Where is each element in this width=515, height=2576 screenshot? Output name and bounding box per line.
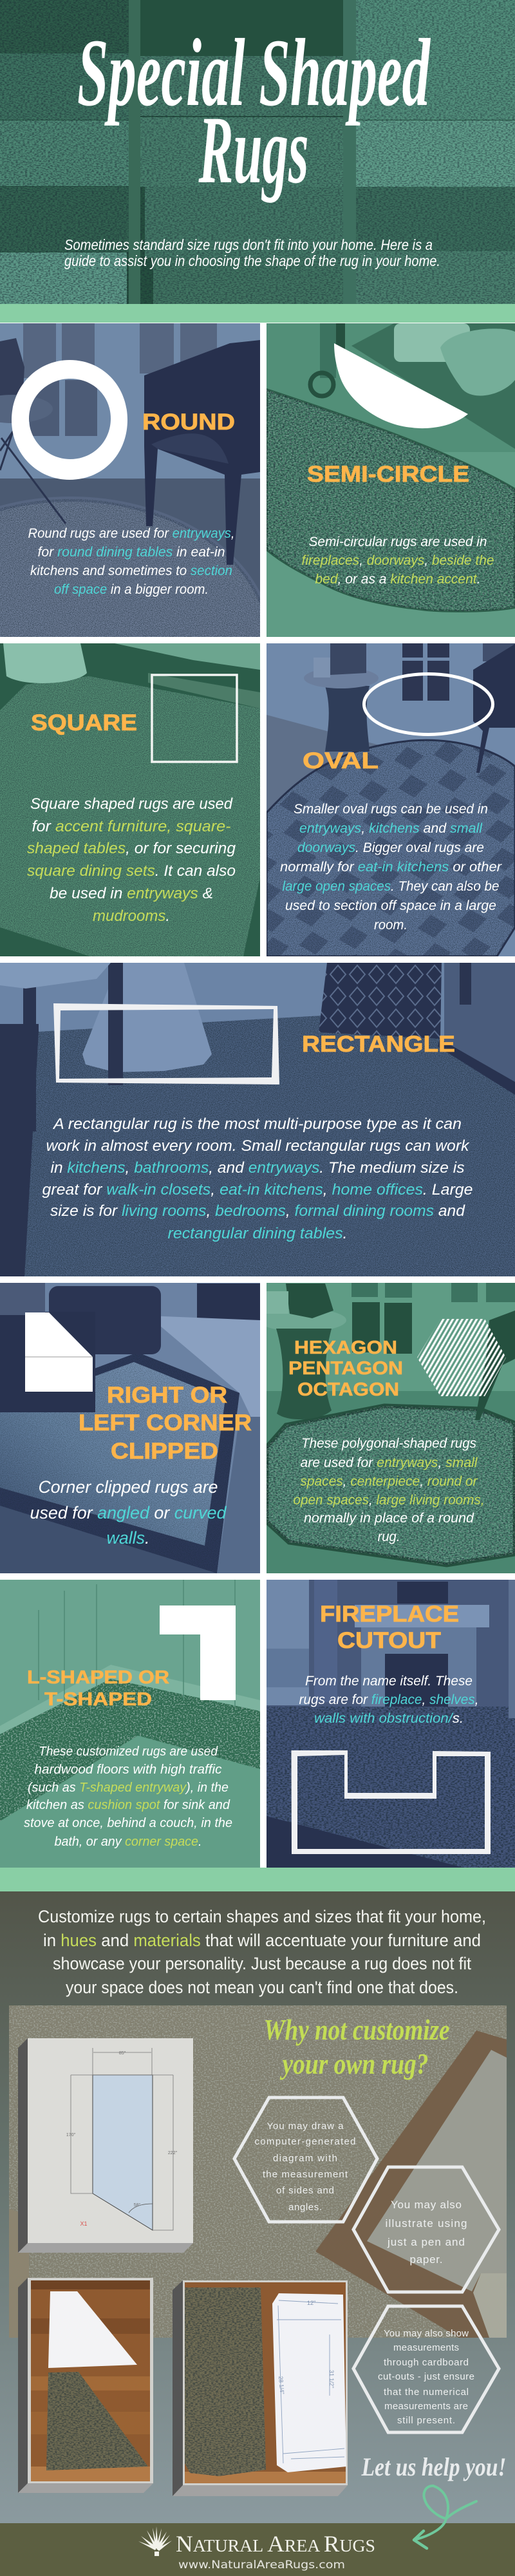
text: round description: kitchens and sometimes to section [30,564,232,578]
text: round description [28,526,235,597]
hexagon callout: pen and paper: just a pen and [387,2236,465,2248]
icon: square outline [152,675,237,762]
heading: L-shaped or T-shaped: T-SHAPED [44,1689,152,1710]
text: oval description [280,802,502,933]
text: customize intro: your space does not mean you can't find one that does. [66,1978,458,1997]
hexagon callout: cardboard cut-outs: through cardboard [384,2357,469,2368]
heading: L-shaped or T-shaped [27,1667,169,1710]
text: fireplace description: rugs are for fireplace, shelves, [299,1692,479,1707]
icon: semi-circle [334,343,468,428]
photo: kitchen runner rug [0,1580,260,1868]
text: L-shaped description: These customized rugs are used [39,1745,218,1759]
icon: oval outline [364,674,493,734]
intro text [64,236,440,269]
text: rectangle description: A rectangular rug is the most multi-purpose type as it can [52,1115,462,1133]
green band bottom [0,1868,515,1891]
panel: L-shaped or T-shaped [0,1580,260,1868]
text: polygon description: normally in place of a round [304,1511,474,1526]
heading: fireplace cutout: CUTOUT [337,1628,441,1653]
text: customize intro [38,1907,486,1997]
panel: hexagon pentagon octagon [259,1283,515,1573]
photo card: second template and rug: 12" [307,2300,315,2306]
text: L-shaped description [24,1745,232,1849]
text: square description: be used in entryways & [50,885,213,902]
website url: www.NaturalAreaRugs.com [178,2559,345,2571]
diagram card: X1 [80,2221,88,2227]
text: round description: for round dining tables in eat-in [37,545,225,560]
text: rectangle description: in kitchens, bathrooms, and entryways. The medium size is [50,1159,465,1177]
heading: hexagon pentagon octagon: OCTAGON [297,1379,399,1400]
icon: rectangle outline [53,1003,279,1084]
text: square description: Square shaped rugs are used [30,795,233,813]
text: polygon description [294,1436,484,1544]
text: fireplace description: walls with obstruction/ s. [314,1711,464,1726]
photo card: second template and rug [173,2280,348,2496]
heading: semi-circle: SEMI-CIRCLE [307,462,469,487]
text: L-shaped description: kitchen as cushion spot for sink and [26,1798,230,1812]
hexagon callout: cardboard cut-outs: still present. [397,2415,455,2426]
text: polygon description: These polygonal-shaped rugs [301,1436,476,1451]
panel: fireplace cutout [267,1580,515,1868]
green band top [0,304,515,323]
hexagon callout: computer diagram: angles. [288,2202,322,2213]
text: L-shaped description: (such as T-shaped entryway), in the [28,1781,229,1795]
hexagon callout: pen and paper: paper. [409,2253,443,2266]
text: round description: off space in a bigger room. [54,582,209,597]
photo: octagon rug [259,1283,515,1573]
photo card: second template and rug: 28 1/4" [277,2376,285,2394]
text: square description [27,795,236,925]
text: semi-circle description: bed, or as a kitchen accent. [315,572,480,587]
photo: corner clipped rug [0,1283,260,1573]
hexagon callout: cardboard cut-outs: that the numerical [384,2387,469,2398]
heading: hexagon pentagon octagon: PENTAGON [288,1358,403,1379]
heading: oval: OVAL [303,748,379,773]
text: oval description: Smaller oval rugs can be used in [294,802,488,817]
hexagon callout: pen and paper [353,2167,499,2292]
hexagon callout: pen and paper: illustrate using [385,2217,467,2230]
text: corner clipped description: walls. [107,1528,149,1548]
hexagon callout: cardboard cut-outs: measurements [393,2342,459,2353]
text: oval description: large open spaces. They can also be [282,879,500,894]
diagram card: 85" [119,2051,126,2056]
photo: oval rug [267,643,515,956]
heading: fireplace cutout [320,1602,459,1653]
diagram card: 222" [168,2151,178,2155]
section background [0,1891,515,2523]
panel: oval [267,643,515,956]
intro text: Sometimes standard size rugs don't fit into your home. Here is a [64,236,433,253]
hexagon callout: computer diagram: computer-generated [255,2136,355,2147]
icon: striped hexagon [417,1319,506,1396]
hexagon callout: computer diagram: the measurement [263,2169,348,2180]
text: oval description: normally for eat-in kitchens or other [280,860,502,875]
text: rectangle description: great for walk-in closets, eat-in kitchens, home offices. Large [42,1181,473,1198]
text: semi-circle description: fireplaces, doorways, beside the [301,553,494,568]
photo card: second template and rug: 31 1/2" [328,2370,335,2388]
text: oval description: used to section off space in a large [285,898,496,913]
footer [0,2523,515,2576]
header panel [0,0,515,304]
heading: hexagon pentagon octagon [288,1338,403,1400]
text: customize intro: in hues and materials that will accentuate your furniture and [43,1931,481,1950]
text: square description: shaped tables, or for securing [27,840,236,857]
text: L-shaped description: hardwood floors with high traffic [35,1763,221,1777]
photo card: template and finished rug [18,2278,153,2493]
heading: rectangle: RECTANGLE [302,1032,455,1057]
heading: square: SQUARE [31,710,137,735]
heading: round: ROUND [142,410,235,435]
text: polygon description: are used for entryways, small [300,1455,478,1470]
text: rectangle description: work in almost every room. Small rectangular rugs can work [46,1137,471,1155]
text: L-shaped description: bath, or any corner space. [54,1835,202,1849]
icon: L shape [160,1605,236,1700]
panel: round [0,323,260,637]
text: corner clipped description: Corner clipped rugs are [39,1477,218,1497]
heading: right or left corner clipped: CLIPPED [111,1439,218,1464]
text: rectangle description: size is for living rooms, bedrooms, formal dining rooms and [50,1202,465,1220]
text: fireplace description: From the name itself. These [305,1674,473,1689]
heading: right or left corner clipped: RIGHT OR [107,1383,227,1408]
hexagon callout: cardboard cut-outs [353,2306,499,2432]
text: corner clipped description: used for angled or curved [30,1503,227,1522]
title [77,19,431,204]
title: Rugs [198,97,309,204]
text: square description: for accent furniture, square- [32,818,230,835]
icon: fireplace cutout outline [291,1750,491,1854]
text: round description: Round rugs are used for entryways, [28,526,235,541]
heading: right or left corner clipped: LEFT CORNER [79,1410,252,1435]
text: polygon description: spaces, centerpiece, round or [300,1474,478,1489]
icon: round ring [12,360,127,480]
panel: rectangle [0,963,515,1276]
text: customize intro: Customize rugs to certain shapes and sizes that fit your home, [38,1907,486,1926]
text: square description: mudrooms. [93,907,170,925]
panel: customize section [0,1891,515,2523]
heading: why not customize: Why not customize [264,2013,449,2046]
diagram card: 170" [66,2133,76,2137]
photo: round rug and chair [0,323,260,637]
diagram card [18,2038,193,2253]
text: semi-circle description [301,535,494,587]
hexagon callout: cardboard cut-outs: You may also show [384,2328,469,2339]
text: rectangle description [42,1115,473,1242]
text: oval description: doorways. Bigger oval rugs are [297,840,484,855]
logo icon: plant [138,2526,172,2556]
text: corner clipped description [30,1477,227,1548]
hexagon callout: computer diagram: of sides and [276,2185,334,2196]
hexagon callout: cardboard cut-outs: cut-outs - just ensure [378,2371,474,2382]
text: oval description: entryways, kitchens and small [299,821,483,836]
photo: rectangular rug [0,963,515,1276]
photo: square rug [0,643,260,956]
text: square description: square dining sets. It can also [27,862,236,880]
icon: clipped corner shape [25,1312,93,1392]
diagram card: 58° [134,2202,140,2208]
text: customize intro: showcase your personality. Just because a rug does not fit [53,1954,471,1973]
hexagon callout: computer diagram [234,2098,377,2222]
text: polygon description: rug. [377,1530,400,1544]
panel: semi-circle [267,323,515,637]
text: semi-circle description: Semi-circular rugs are used in [309,535,487,549]
heading: why not customize [264,2013,449,2080]
text: L-shaped description: stove at once, behind a couch, in the [24,1816,232,1830]
heading: fireplace cutout: FIREPLACE [320,1602,459,1627]
photo: rolled rugs on shelves [0,0,515,304]
heading: L-shaped or T-shaped: L-SHAPED OR [27,1667,169,1688]
hexagon callout: cardboard cut-outs: measurements are [384,2401,468,2412]
text: fireplace description [299,1674,479,1726]
text: oval description: room. [374,918,407,933]
logo wordmark: NATURAL AREA RUGS [176,2531,375,2557]
photo: burlap and mirror frame [9,2005,507,2338]
hexagon callout: pen and paper: You may also [391,2199,462,2211]
intro text: guide to assist you in choosing the shape of the rug in your home. [64,252,440,269]
heading: why not customize: your own rug? [279,2047,429,2080]
heading: right or left corner clipped [79,1383,252,1464]
panel: square [0,643,260,956]
photo: semi-circle rug [267,323,515,637]
heading: hexagon pentagon octagon: HEXAGON [294,1338,397,1358]
arrow: green loop [414,2486,476,2548]
hexagon callout: computer diagram: diagram with [273,2153,337,2164]
hexagon callout: computer diagram: You may draw a [267,2121,344,2132]
text: polygon description: open spaces, large living rooms, [294,1493,484,1508]
panel: corner clipped [0,1283,260,1573]
photo: fireplace room [267,1580,515,1868]
text: rectangle description: rectangular dining tables . [167,1225,348,1242]
